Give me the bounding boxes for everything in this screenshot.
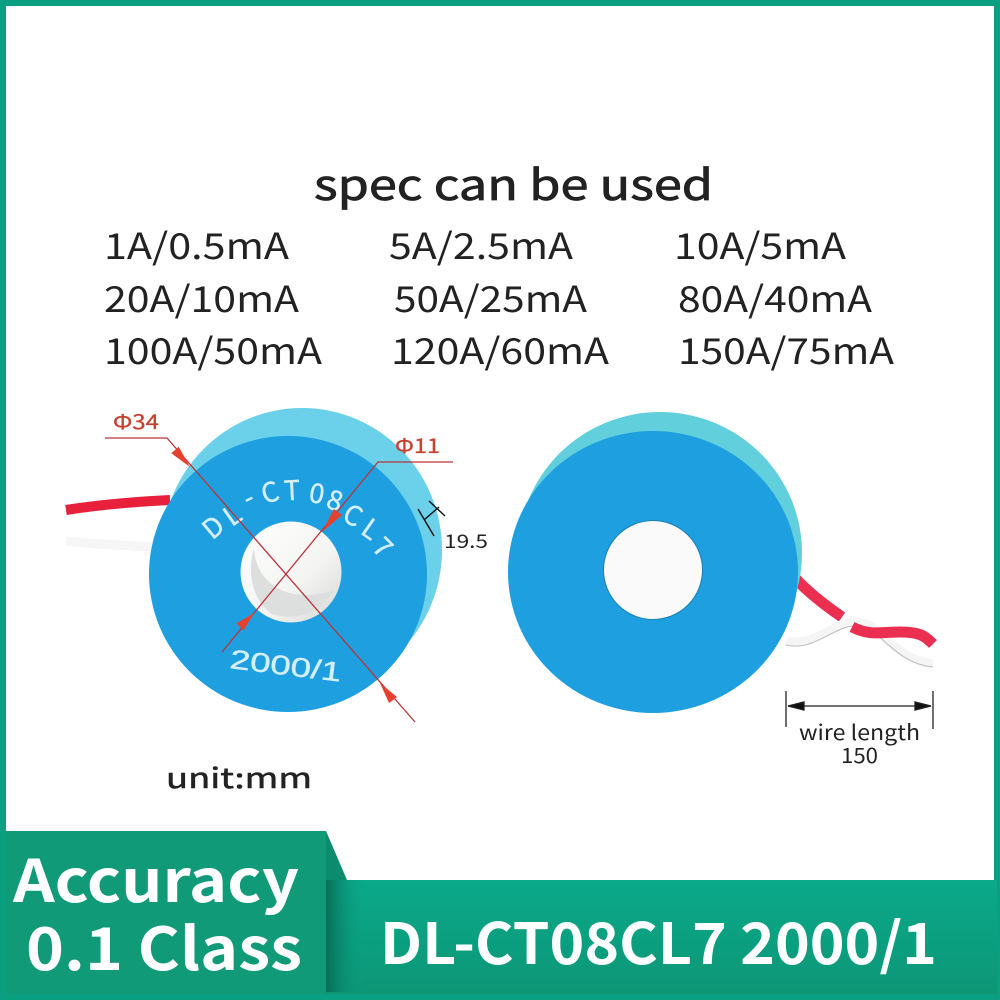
printed model: C <box>337 492 370 535</box>
ring body <box>518 412 802 694</box>
label: phi 34: Φ34 <box>113 406 159 435</box>
class text: 0.1 Class <box>26 902 302 987</box>
spec table: 80A/40mA <box>678 271 872 323</box>
spec table: 20A/10mA <box>104 271 299 323</box>
spec table: 10A/5mA <box>674 218 846 270</box>
right wires <box>786 578 933 667</box>
printed model: 7 <box>365 527 403 565</box>
spec table: 50A/25mA <box>394 271 587 323</box>
printed model: D <box>192 505 232 547</box>
dimension arrowheads <box>171 447 397 703</box>
printed model: T <box>283 469 301 508</box>
ring body <box>162 408 442 692</box>
spec table: 1A/0.5mA <box>104 218 289 270</box>
spec table: 150A/75mA <box>678 323 894 375</box>
spec table: 5A/2.5mA <box>389 218 573 270</box>
label: phi 11: Φ11 <box>395 430 440 459</box>
printed model: 0 <box>307 471 328 512</box>
footer band <box>326 831 997 994</box>
printed model: L <box>214 493 248 534</box>
accuracy badge <box>6 831 326 994</box>
dimension lines: diameters <box>105 438 453 722</box>
label: 150: 150 <box>841 740 878 770</box>
printed model: L <box>355 507 389 548</box>
right transformer photo <box>508 412 933 770</box>
footer fold <box>326 831 347 880</box>
printed model: 8 <box>322 478 349 519</box>
ring face <box>149 436 427 712</box>
printed model: - <box>234 476 260 515</box>
spec table <box>104 218 894 375</box>
label: thickness: 19.5 <box>444 527 488 554</box>
thickness dimension <box>418 501 445 536</box>
heading: spec can be used: spec can be used <box>314 152 713 213</box>
wire length dimension <box>786 691 933 729</box>
accuracy text: Accuracy <box>12 834 299 919</box>
label: wire length: wire length <box>799 717 920 747</box>
left transformer photo <box>66 406 488 722</box>
ring hole <box>604 520 702 620</box>
printed ratio: 2000/1 <box>228 644 343 688</box>
ring hole <box>240 522 342 622</box>
unit label: unit:mm <box>166 757 312 797</box>
spec table: 120A/60mA <box>391 323 609 375</box>
footer model text: DL-CT08CL7 2000/1 <box>380 899 937 981</box>
ring face <box>508 431 798 713</box>
printed model <box>192 469 403 565</box>
spec table: 100A/50mA <box>104 323 322 375</box>
left wires <box>66 500 170 551</box>
printed model: C <box>256 470 283 512</box>
